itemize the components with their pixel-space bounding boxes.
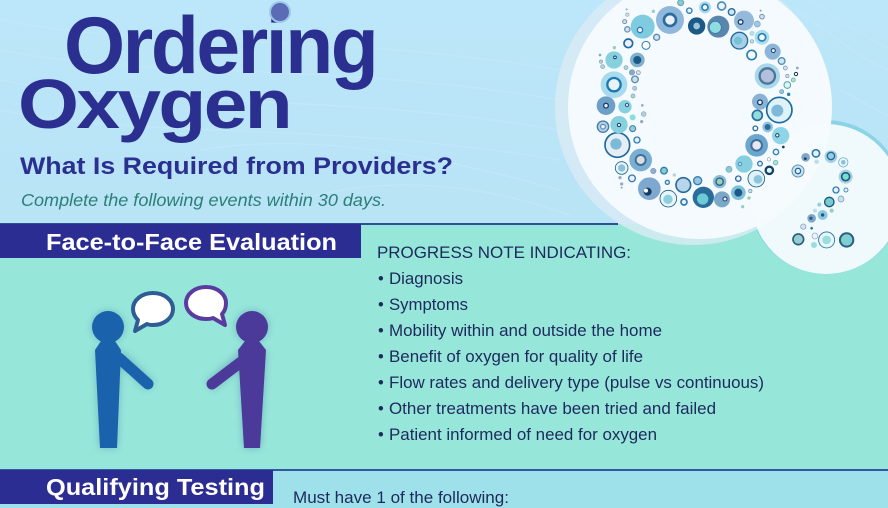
progress note checklist: Flow rates and delivery type (pulse vs continuous) [389,374,764,392]
progress note checklist: Other treatments have been tried and failed [389,400,716,418]
progress note checklist: Mobility within and outside the home [389,322,662,340]
heading: qualifying testing: Qualifying Testing [46,474,265,500]
section rule [0,223,618,225]
title: Oxygen [18,65,290,143]
progress note checklist: • [378,400,384,418]
section rule [0,469,888,471]
title: Ordering [64,0,376,90]
progress note checklist: • [378,374,384,392]
progress note checklist: Benefit of oxygen for quality of life [389,348,643,366]
progress note checklist: Symptoms [389,296,468,314]
small circle with 2 made of bubbles [751,124,888,274]
heading: face-to-face evaluation: Face-to-Face Evaluation [46,229,337,255]
progress note checklist: • [378,426,384,444]
progress note checklist [377,244,764,444]
heading: face-to-face evaluation [0,224,361,258]
person: right, purple [210,311,268,448]
large circle with Q made of bubbles [555,0,888,274]
bubbles forming letter Q and numeral 2 [597,0,853,248]
panel: qualifying testing background [0,469,888,508]
subtitle: What Is Required from Providers? [20,153,453,180]
panel: face-to-face background [0,224,888,469]
person: left, blue [92,311,150,448]
heading: qualifying testing [0,470,273,504]
speech bubble: left [133,293,173,331]
progress note checklist: Patient informed of need for oxygen [389,426,657,444]
progress note checklist: Diagnosis [389,270,463,288]
sky background [0,0,888,224]
title [18,0,376,143]
progress note checklist: PROGRESS NOTE INDICATING: [377,244,631,262]
timeframe note: Complete the following events within 30 days. [21,190,386,210]
qualifying testing intro text: Must have 1 of the following: [293,489,509,507]
progress note checklist: • [378,296,384,314]
title dot over the i [269,1,291,23]
speech bubble: right [186,287,226,325]
illustration: two people talking [92,287,268,448]
progress note checklist: • [378,348,384,366]
progress note checklist: • [378,322,384,340]
progress note checklist: • [378,270,384,288]
